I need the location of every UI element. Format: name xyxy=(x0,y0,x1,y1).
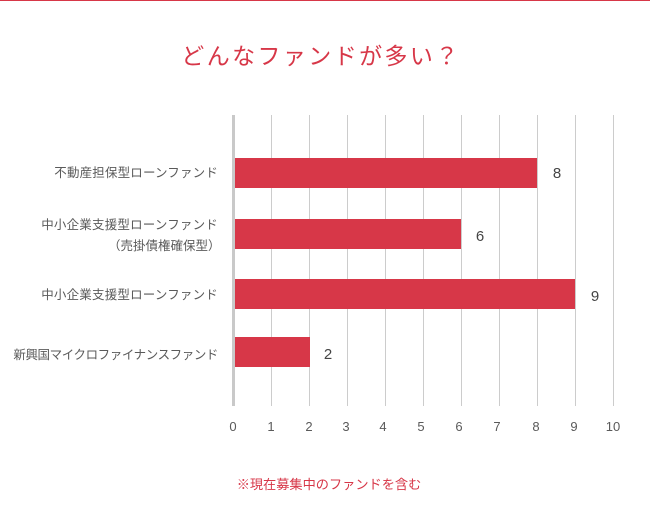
category labels: （売掛債権確保型） xyxy=(108,238,220,253)
bar: 中小企業支援型ローンファンド（売掛債権確保型） xyxy=(235,219,461,249)
value labels xyxy=(324,165,599,363)
value labels: 2 xyxy=(324,346,332,363)
x axis labels: 2 xyxy=(305,419,313,434)
x axis labels: 0 xyxy=(229,419,237,434)
x axis labels xyxy=(229,419,620,434)
footnote: ※現在募集中のファンドを含む xyxy=(237,477,421,492)
category labels: 中小企業支援型ローンファンド xyxy=(41,287,218,302)
x axis labels: 4 xyxy=(379,419,387,434)
value labels: 6 xyxy=(476,228,484,245)
title: どんなファンドが多い？ xyxy=(181,43,461,69)
x axis labels: 7 xyxy=(493,419,501,434)
bar: 新興国マイクロファイナンスファンド xyxy=(235,337,310,367)
category labels: 新興国マイクロファイナンスファンド xyxy=(13,348,218,362)
x axis labels: 1 xyxy=(267,419,275,434)
x axis labels: 10 xyxy=(606,419,620,434)
x axis labels: 9 xyxy=(570,419,578,434)
x axis labels: 5 xyxy=(417,419,425,434)
bar: 不動産担保型ローンファンド xyxy=(235,158,537,188)
value labels: 9 xyxy=(591,288,599,305)
x axis labels: 3 xyxy=(342,419,350,434)
x axis labels: 8 xyxy=(532,419,540,434)
category labels xyxy=(13,166,220,362)
category labels: 不動産担保型ローンファンド xyxy=(54,166,218,180)
x axis labels: 6 xyxy=(455,419,463,434)
category labels: 中小企業支援型ローンファンド xyxy=(41,217,218,232)
bar: 中小企業支援型ローンファンド xyxy=(235,279,575,309)
bar chart xyxy=(13,115,620,434)
value labels: 8 xyxy=(553,165,561,182)
